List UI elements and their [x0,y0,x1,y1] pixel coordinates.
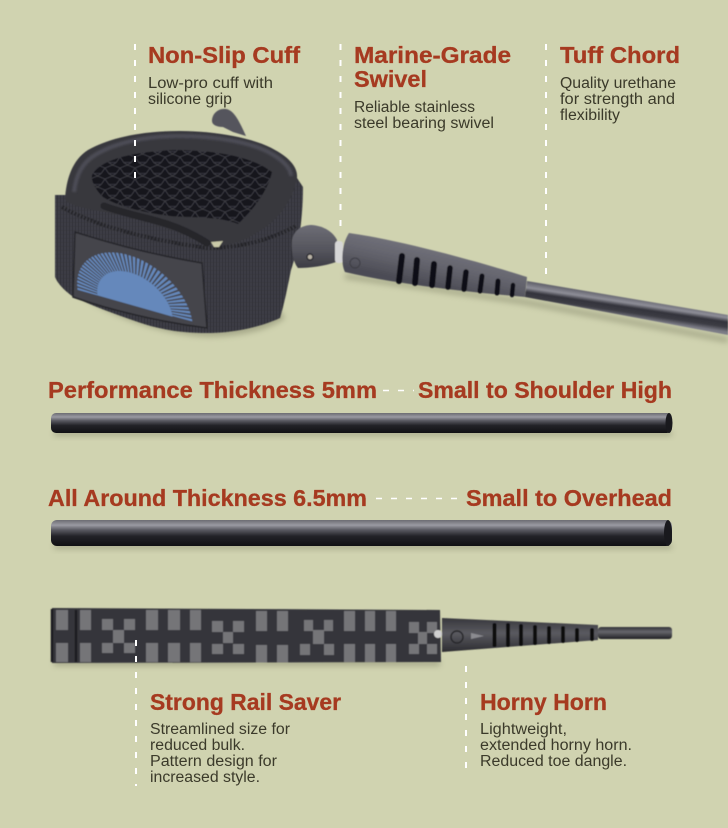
heading: wave range: Small to Shoulder High [418,377,672,403]
shadow [54,660,440,666]
horn logo [451,631,463,643]
description: Reliable stainless [354,99,475,116]
description: flexibility [560,107,620,124]
swivel screw [307,254,313,260]
cuff front piping [104,206,207,243]
cuff pull tab [212,109,246,136]
cord tip [598,627,672,639]
cuff shadow [62,280,285,337]
rod shadow [54,431,672,436]
silver bearing [434,630,442,638]
leader dashes [376,498,462,500]
description: silicone grip [148,91,232,108]
callout: Marine-Grade Swivel [354,42,511,132]
6.5mm cord sample [51,520,672,546]
description: Quality urethane [560,75,676,92]
horn slots [494,625,592,645]
description: steel bearing swivel [354,115,494,132]
cord [525,281,728,335]
callout: Strong Rail Saver [150,689,341,786]
leader line: swivel [340,44,342,232]
heading: Swivel [354,66,427,92]
leader line: horn [465,666,467,772]
heading: thickness: All Around Thickness 6.5mm [48,485,367,511]
heading: Non-Slip Cuff [148,42,300,68]
rod end cap [666,413,672,433]
product photo: rail saver and horn [52,608,672,666]
description: Reduced toe dangle. [480,753,627,770]
horn slots [399,256,513,295]
horn and cord shadow [345,276,728,340]
rod shadow [54,544,672,549]
callout: Horny Horn [480,689,632,770]
horn body [442,618,598,652]
description: extended horny horn. [480,737,632,754]
description: Streamlined size for [150,721,290,738]
heading: Strong Rail Saver [150,689,341,715]
horn triangle mark [471,633,484,639]
leader dashes [383,390,414,392]
description: for strength and [560,91,675,108]
cuff rim highlight [74,136,291,192]
description: Lightweight, [480,721,567,738]
patch blue sun logo [72,248,192,322]
5mm cord sample [51,413,672,433]
rail saver woven pattern [56,610,437,663]
cuff rubber patch [73,232,207,328]
callout: Non-Slip Cuff [148,42,300,108]
spec row: Performance 5mm [48,377,672,436]
rail saver strap [52,608,441,663]
cuff neoprene rim [65,131,297,246]
spec row: All Around 6.5mm [48,485,672,549]
heading: Marine-Grade [354,42,511,68]
stainless bearing [335,241,343,263]
horn logo [350,258,360,268]
rod end cap [664,520,672,546]
leader line: cord [545,44,547,276]
leader line: rail saver [135,640,137,786]
cuff inner mesh [92,150,272,224]
horn body [342,233,527,297]
description: Pattern design for [150,753,277,770]
swivel cap [292,225,337,268]
rail saver stitch [52,609,76,662]
callout: Tuff Chord [560,42,680,124]
heading: wave range: Small to Overhead [466,485,672,511]
heading: Tuff Chord [560,42,680,68]
cuff webbing band [55,175,303,333]
description: increased style. [150,769,260,786]
leader line: cuff [134,44,136,183]
heading: thickness: Performance Thickness 5mm [48,377,377,403]
description: Low-pro cuff with [148,75,273,92]
cuff gap [211,241,223,247]
description: reduced bulk. [150,737,245,754]
product photo: ankle cuff with swivel, horn and cord [55,109,728,340]
webbing stitched edge [62,207,296,248]
heading: Horny Horn [480,689,607,715]
